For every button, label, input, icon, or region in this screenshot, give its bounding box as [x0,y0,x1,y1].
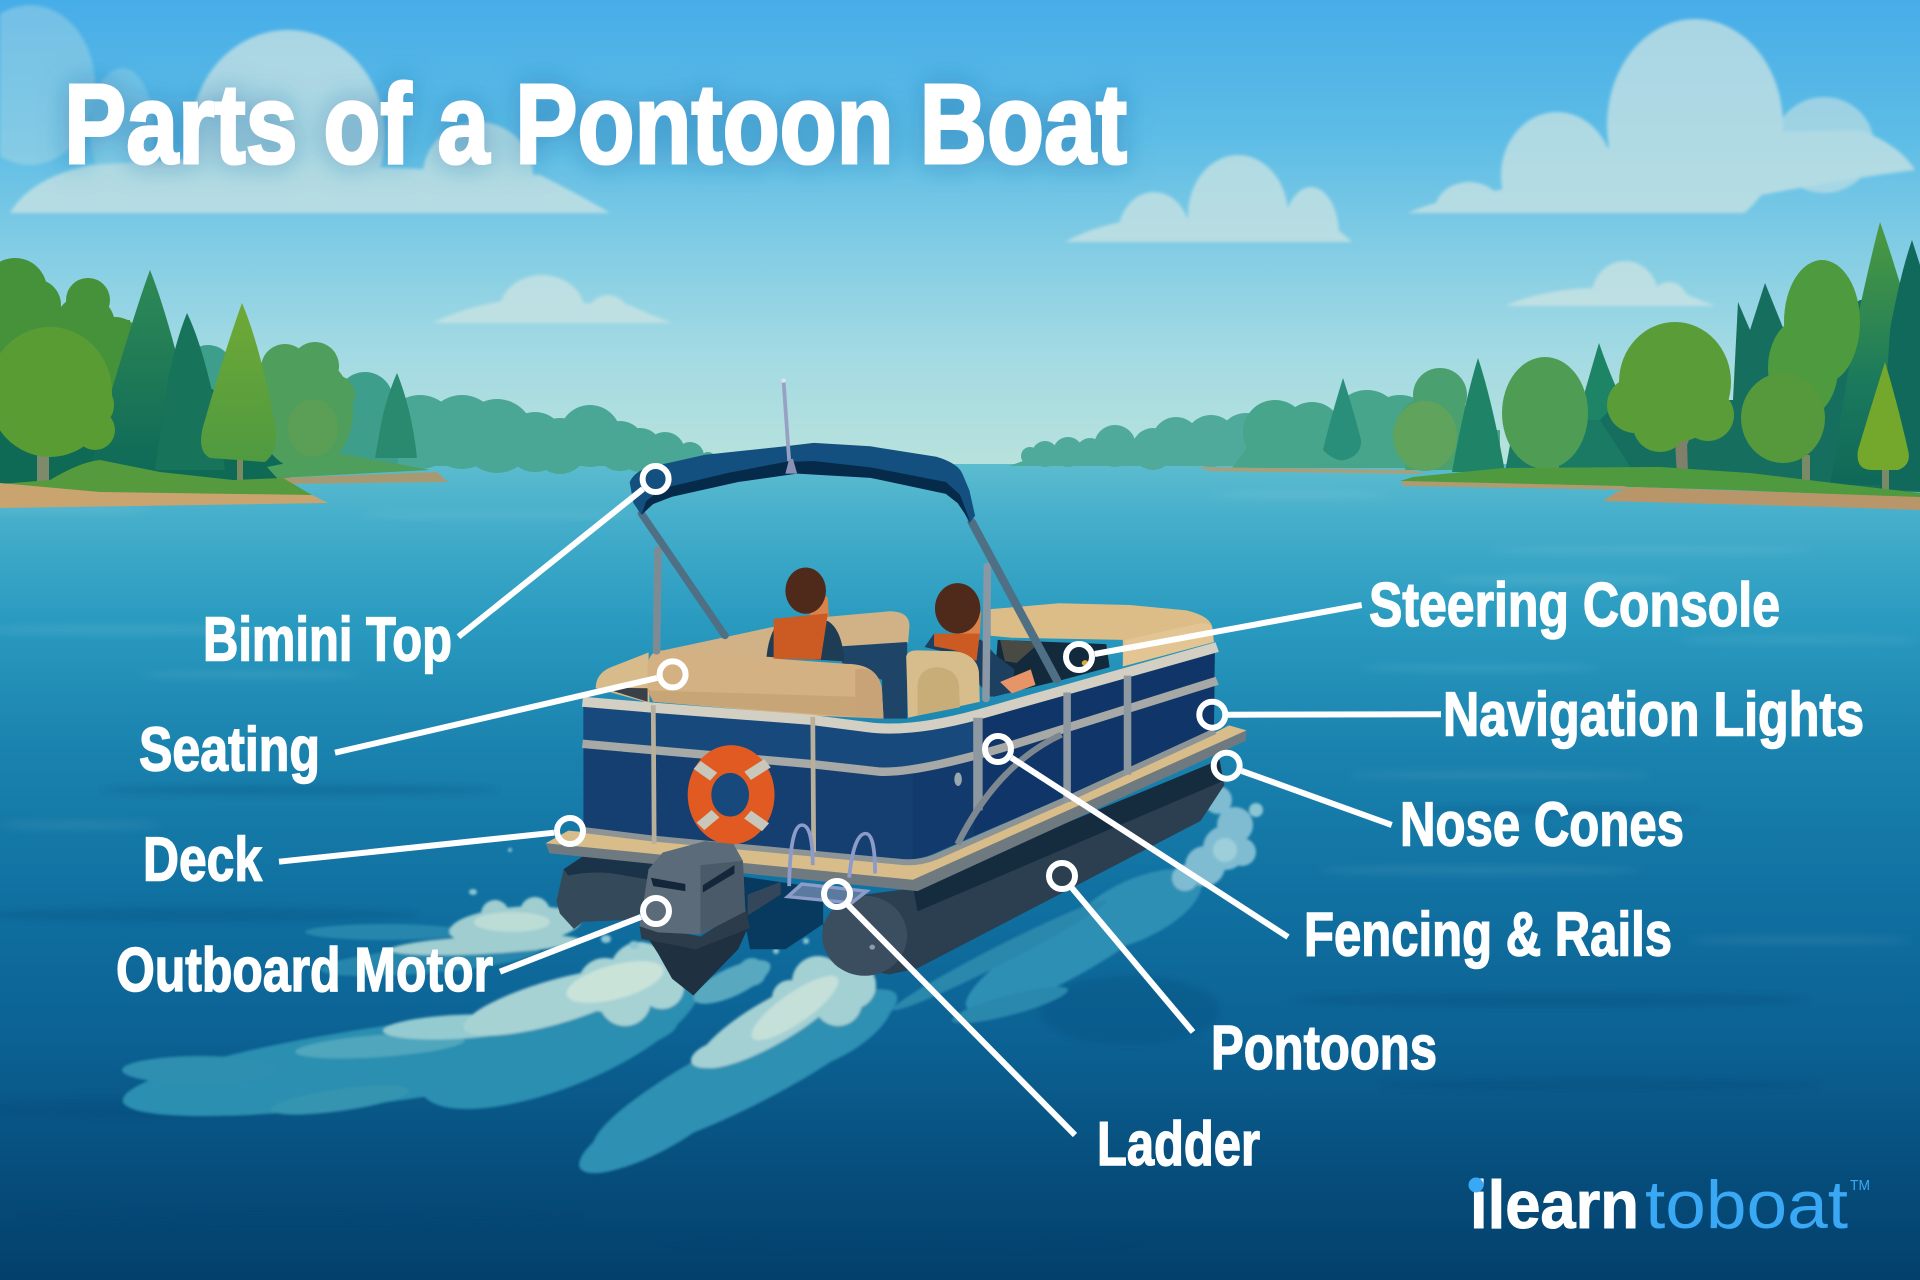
bimini frame poles [641,514,1057,699]
teal back trees [183,345,398,466]
light conifer with trunk [201,303,276,483]
teal conifer small [375,373,417,458]
conifer dark [90,270,200,470]
spray droplets [469,803,1263,954]
navy centre console column [842,642,907,719]
sky background [0,0,1920,466]
mid rail [582,681,1217,772]
conifer right b [1563,343,1622,470]
outboard motor [639,841,781,996]
rounded green tree mid [257,342,355,470]
middle seat [906,650,980,718]
rounded canopy back left [0,258,143,430]
logo: ilearntoboat: ilearn [1470,1167,1639,1243]
callout: Fencing and Rails [985,736,1672,970]
water background [0,464,1920,1280]
teal hills right [1232,390,1500,468]
far tree line right [1009,413,1320,470]
cloud: top left [0,4,610,215]
foam bright upper [474,912,550,932]
teal wake centre [569,965,912,1189]
dark backdrop right [1600,283,1920,492]
rounded teal tree right [1400,368,1473,470]
foam upper left [390,897,582,959]
dark band under trees [1505,420,1920,480]
console [993,640,1110,697]
grass right [1400,467,1920,498]
conifer dark second [155,313,225,470]
person left [767,568,844,661]
callout: Outboard Motor: Outboard Motor [116,936,493,1005]
callout: Fencing and Rails: Fencing & Rails [1304,901,1672,970]
dark backdrop [0,380,290,490]
teal conifer right [1323,378,1361,460]
callout: Bimini Top [203,466,669,675]
foam bow bright [1213,838,1237,862]
bottom rail [585,731,1215,862]
front u-bench [991,603,1214,666]
far tree line left [340,395,716,474]
callout: Steering Console [1066,571,1780,670]
sand rear [277,472,448,484]
rear bench back [653,611,909,660]
front round tree with trunk [0,327,115,486]
callout: Pontoons: Pontoons [1211,1014,1437,1083]
tall conifers right [1830,222,1920,485]
seat back left corner [596,653,649,703]
callout: Nose Cones: Nose Cones [1400,791,1684,860]
water streaks [0,491,1920,1248]
callout: Deck [143,818,583,895]
foam bright left [562,953,668,1011]
logo: ilearntoboat: TM [1850,1177,1870,1194]
callout: Pontoons [1049,863,1437,1083]
callout: Navigation Lights [1199,681,1864,750]
deck rim [546,730,1246,891]
right shoreline with trees [1009,222,1920,510]
callout: Ladder [824,881,1260,1179]
light conifer right [1858,362,1909,492]
hull panels [583,648,1215,859]
cloud: low right [1507,260,1714,308]
callout: Seating [139,661,686,785]
logo: ilearntoboat [1468,1167,1870,1243]
foam centre [688,956,876,1083]
callout: Deck: Deck [143,826,262,895]
callout: Ladder: Ladder [1097,1110,1260,1179]
rear bench seat [648,650,884,719]
title: Parts of a Pontoon Boat [64,61,1127,187]
under deck shadow [649,863,823,949]
hull side darker [974,648,1215,836]
lighter streaks left [122,1011,528,1121]
seat floor dark left [601,687,648,702]
clouds [0,5,1915,349]
boat wake [117,786,1263,1189]
sand strip far [1197,467,1425,474]
right pontoon [822,760,1224,976]
sand front right [1603,487,1920,510]
left shoreline with trees [0,258,716,508]
small foam right of motor [688,952,776,1012]
antenna [781,379,797,474]
logo: ilearntoboat: toboat [1645,1167,1848,1243]
grass front [0,460,312,495]
ladder [788,825,875,903]
hull upper band [583,707,974,771]
pale bush [288,399,338,457]
pontoon boat illustration [546,379,1246,996]
posts and brace [653,676,1128,852]
teal wake right [953,852,1213,1032]
person right [925,583,1035,697]
hull light [954,772,962,786]
life ring [688,745,775,844]
callout: Steering Console: Steering Console [1369,571,1780,640]
light streak pontoon side [889,893,1111,1030]
left pontoon [557,857,651,929]
bimini top canopy [630,443,975,523]
callout: Nose Cones [1214,753,1684,860]
grass rear [267,453,430,478]
conifer right a [1452,358,1505,472]
callout: Outboard Motor [116,898,669,1005]
teal wake layer left [117,931,719,1139]
deck top [546,725,1246,880]
hull corner shade [913,760,974,859]
pale bush right [1393,401,1457,471]
upper rail [582,647,1217,729]
teal streak upper [305,924,541,983]
foam bright centre [744,966,846,1050]
sand strip mid [1402,481,1640,490]
cloud: small centre [434,274,670,324]
cloud: large right [1408,19,1915,238]
callout: Seating: Seating [139,716,320,785]
cloud: mid right [1066,153,1352,244]
tall conifer far right [1880,240,1920,490]
foam bow [1172,786,1256,891]
big round tree [1607,322,1734,476]
callout: Bimini Top: Bimini Top [203,606,452,675]
round tree right mid [1502,357,1588,471]
foam left lower [458,942,684,1049]
sand front [0,483,328,508]
round trees stack right [1741,260,1860,485]
